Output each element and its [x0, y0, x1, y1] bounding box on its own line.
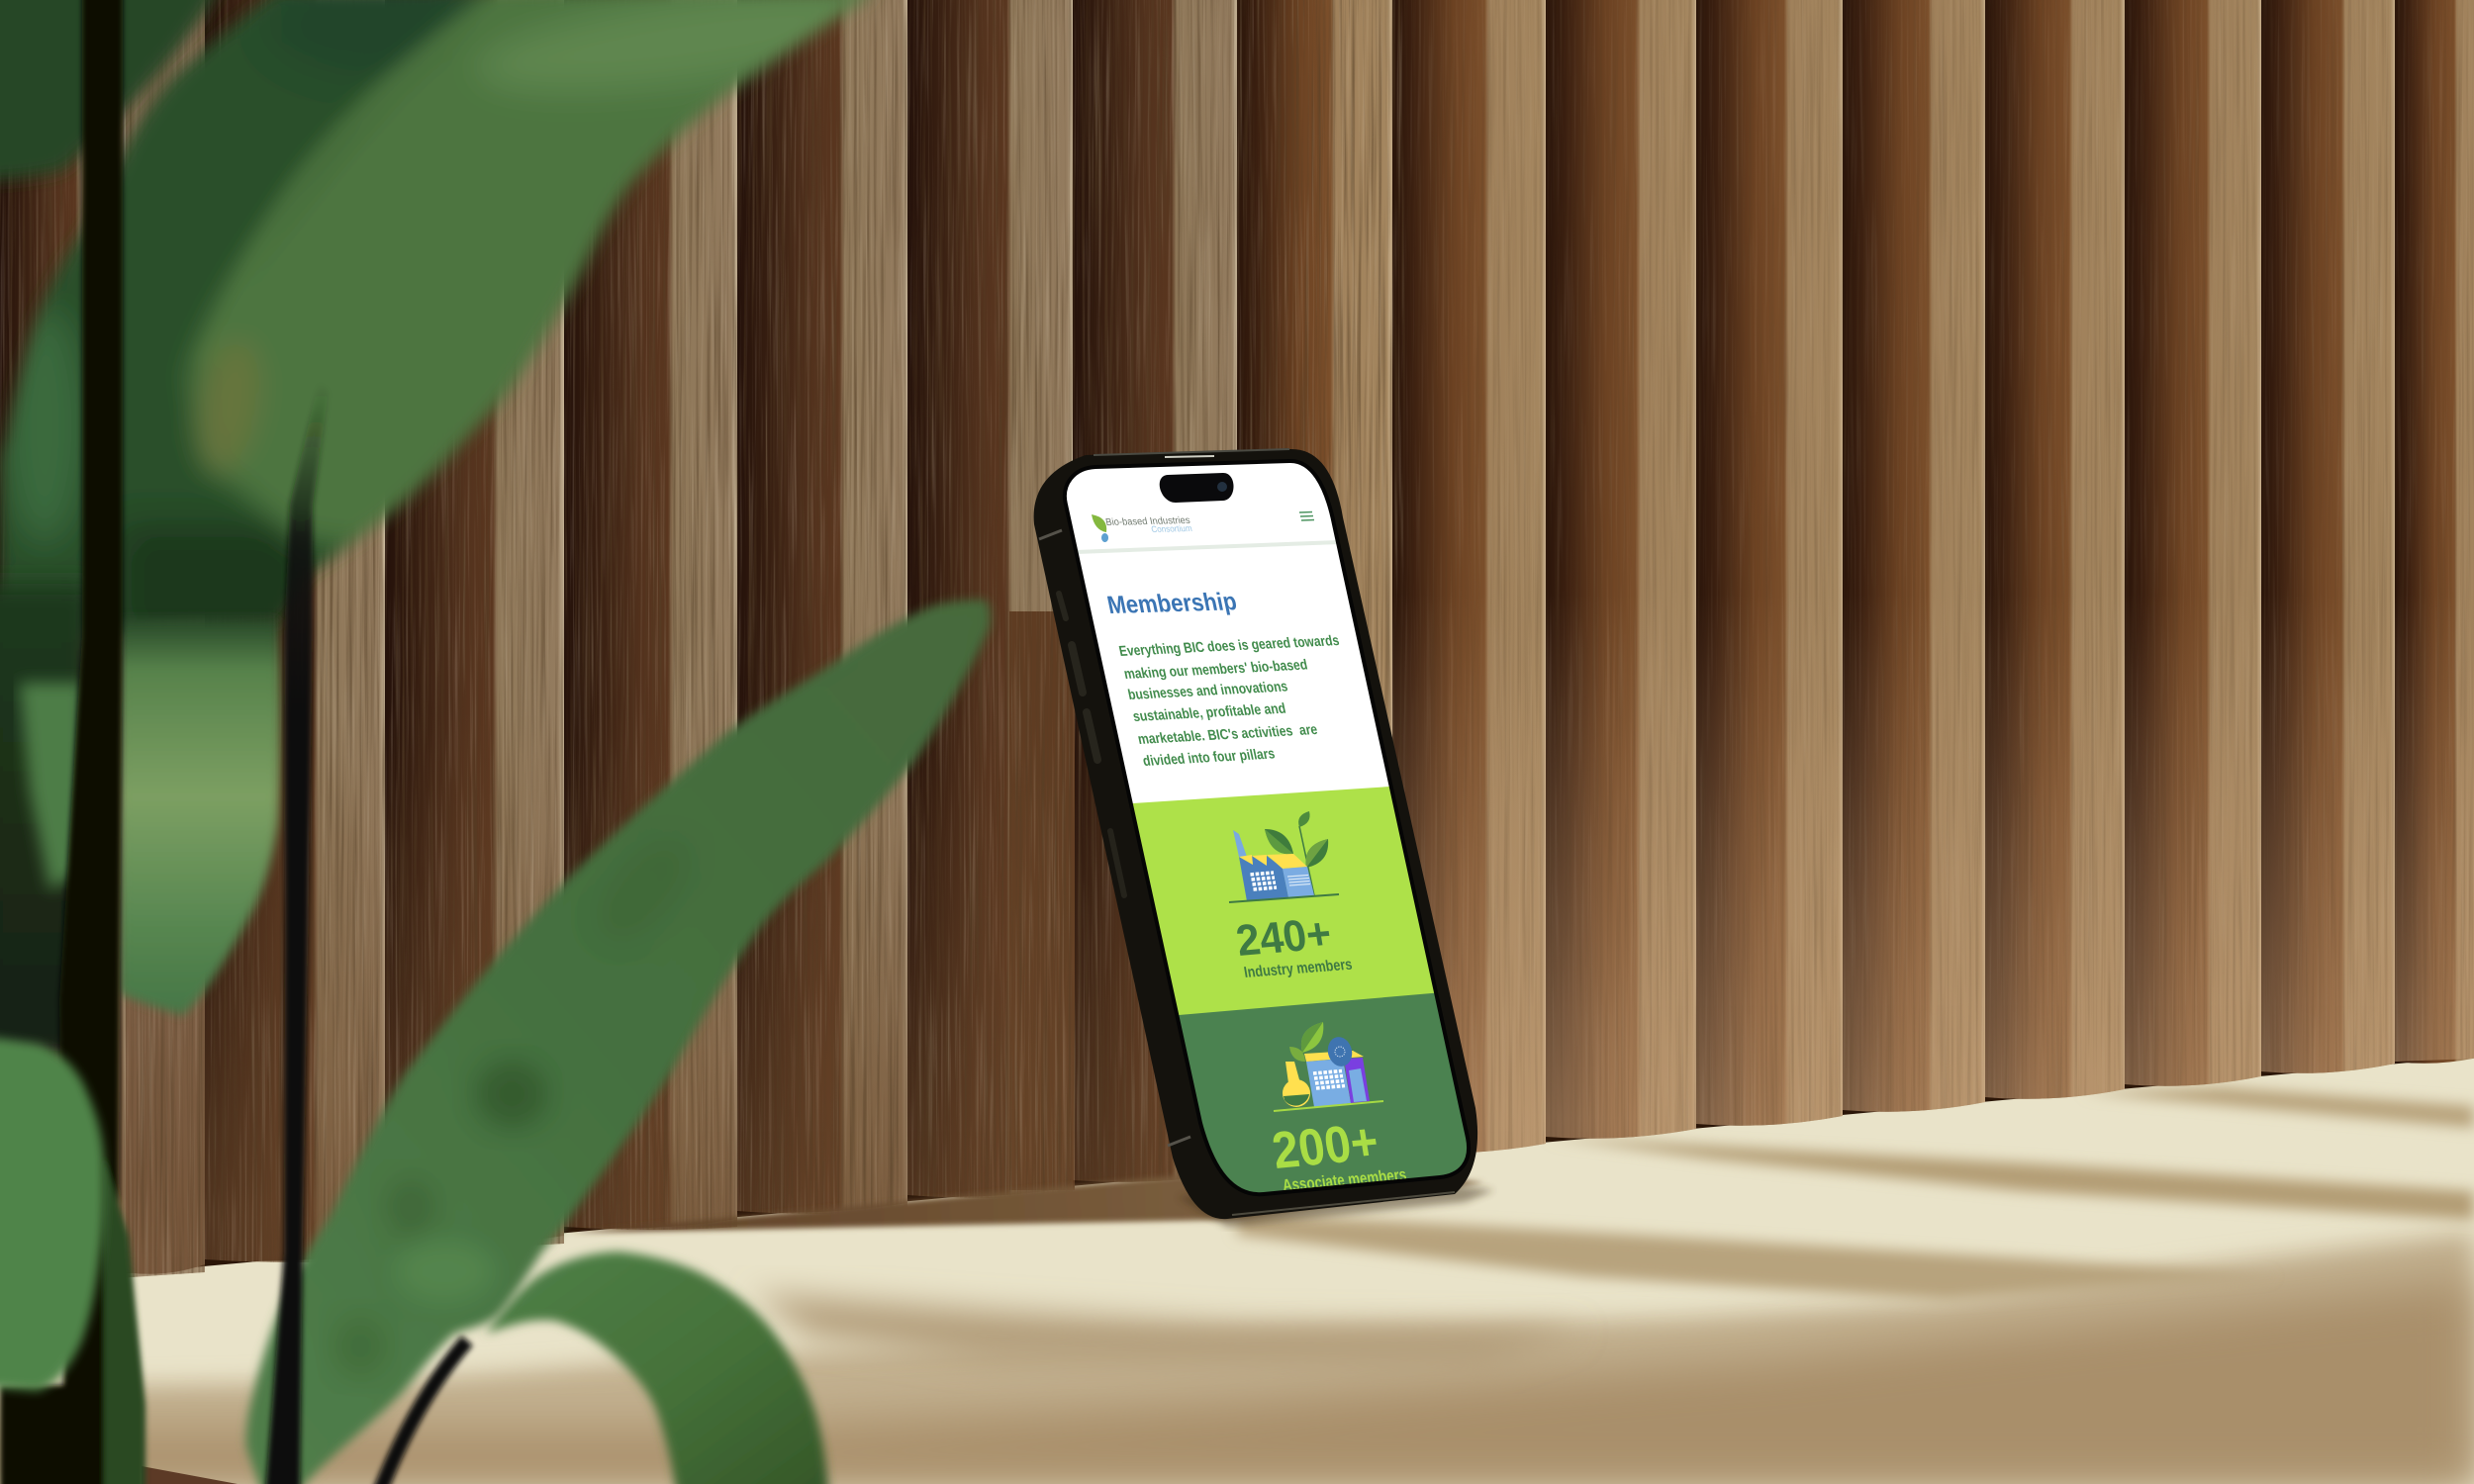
thin stem — [265, 381, 329, 1484]
dark stem base leaf — [104, 1158, 145, 1484]
plant: top-left dark leaf — [0, 0, 223, 180]
phone body — [1034, 449, 1477, 1219]
floor shadow: dark corner — [142, 1466, 238, 1484]
screen bezel — [1065, 461, 1469, 1194]
pale leaf behind stem — [20, 683, 84, 890]
phone top speaker glint — [1165, 456, 1214, 457]
intro paragraph — [1117, 633, 1341, 770]
intro paragraph: marketable. BIC's activities are — [1136, 722, 1319, 748]
phone bottom rim highlight — [1232, 1192, 1455, 1215]
big leaf dark top — [277, 0, 456, 60]
antenna band upper — [1039, 530, 1062, 539]
dynamic island — [1160, 473, 1233, 503]
big leaf olive blade — [179, 0, 777, 558]
plant: dark undergrowth at left — [0, 584, 94, 1059]
big leaf midrib — [203, 0, 515, 366]
intro paragraph: Everything BIC does is geared towards — [1117, 633, 1341, 660]
centre leaf base — [228, 584, 1009, 1484]
logo leaf — [1092, 514, 1108, 542]
floor shadow: band below phone — [1237, 1213, 2276, 1300]
logo consortium: Consortium — [1150, 523, 1192, 534]
intro paragraph: divided into four pillars — [1141, 746, 1277, 770]
stat: 240+: 240+ — [1233, 909, 1335, 966]
plant: small left leaf — [0, 1037, 105, 1391]
intro paragraph: sustainable, profitable and — [1131, 701, 1287, 725]
slat shadow below the phone top — [1009, 611, 1075, 1190]
mute switch — [1059, 594, 1066, 618]
stat: 200+: 200+ — [1269, 1113, 1382, 1180]
lower wash right — [1237, 0, 2474, 1167]
plant: thin stems over leaves — [265, 381, 467, 1484]
big leaf dark lower — [123, 518, 289, 621]
leaf blotch upper — [582, 826, 705, 955]
antenna band lower — [1168, 1137, 1190, 1146]
screen — [1065, 461, 1469, 1194]
camera lens — [1217, 482, 1227, 492]
leaf blotch middle — [476, 1061, 547, 1128]
volume down — [1087, 712, 1097, 760]
volume up — [1072, 645, 1083, 693]
header divider — [1076, 540, 1340, 554]
main stem — [0, 0, 123, 1484]
floor shadow: band left of phone — [752, 1294, 1583, 1365]
curved stem — [379, 1341, 467, 1484]
cast shadow on floor under slats — [568, 1165, 1484, 1233]
heading: Membership: Membership — [1104, 588, 1239, 619]
big leaf bright tip — [489, 0, 857, 91]
leaf blotch bottom — [334, 1317, 386, 1376]
plant: light leaf — [119, 618, 280, 1015]
panel: associate members — [1168, 991, 1504, 1217]
floor — [0, 1039, 2474, 1484]
big leaf green left side — [5, 307, 84, 544]
plant: long centre leaf — [228, 584, 1009, 1484]
icon: laboratory and building — [1274, 1022, 1383, 1111]
lower wash left — [0, 0, 1237, 1286]
plant: bottom curved leaf — [486, 1252, 829, 1484]
big leaf olive spot — [189, 334, 270, 477]
big leaf base — [0, 0, 394, 625]
plant: dark stems — [0, 0, 145, 1484]
floor shadow: middle band — [1545, 1137, 2474, 1220]
hamburger menu — [1299, 512, 1314, 520]
plant: big leaf — [0, 0, 914, 653]
logo wordmark: Bio-based Industries — [1104, 515, 1191, 528]
panel: industry members — [1118, 786, 1455, 1017]
phone top rim highlight — [1094, 449, 1289, 455]
icon: factory with leaves — [1229, 811, 1339, 902]
label: Industry members: Industry members — [1243, 957, 1354, 981]
intro paragraph: businesses and innovations — [1126, 679, 1289, 703]
floor shadow: far band — [2081, 1087, 2474, 1128]
screen content — [1076, 473, 1504, 1217]
leaf pale patch — [396, 1240, 495, 1303]
intro paragraph: making our members' bio-based — [1122, 658, 1309, 683]
leaf blotch low — [385, 1177, 436, 1237]
phone — [1034, 449, 1477, 1219]
label: Associate members: Associate members — [1281, 1164, 1408, 1195]
phone contact shadow — [1178, 1177, 1494, 1227]
sim tray — [1110, 831, 1124, 895]
